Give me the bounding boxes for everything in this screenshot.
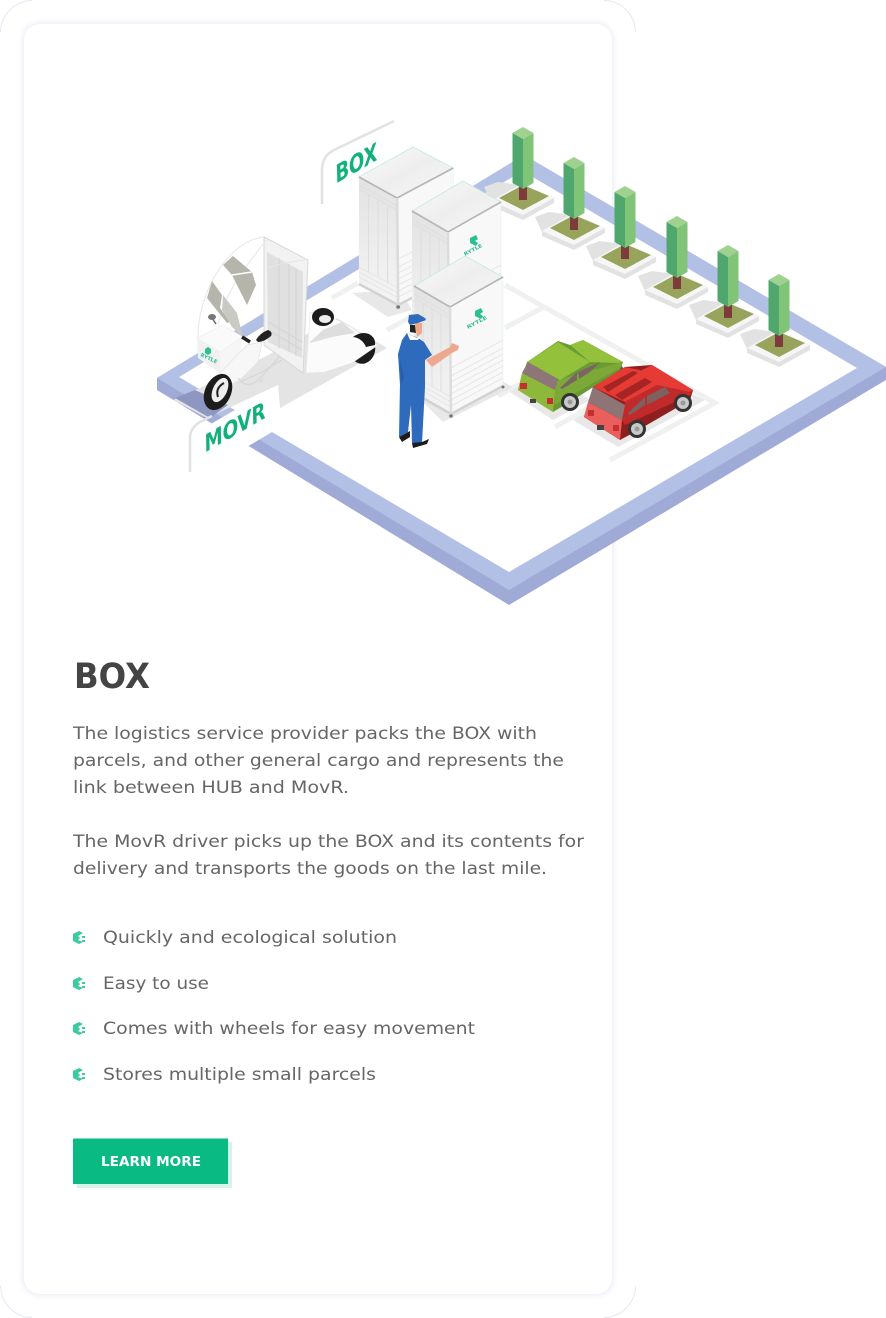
paragraph one: [72, 724, 564, 798]
handle: [242, 337, 250, 342]
logo on front rack: RYTLE: [466, 315, 489, 331]
bullet: wheels: Comes with wheels for easy movement: [103, 1019, 475, 1039]
bullet: quickly: Quickly and ecological solution: [103, 928, 397, 948]
logo on middle rack: RYTLE: [463, 243, 484, 258]
bullet: easy: Easy to use: [103, 974, 209, 994]
heading: BOX: [74, 657, 150, 697]
worker: [398, 314, 459, 448]
paragraph two: delivery and transports the goods on the last mile.: [73, 859, 547, 879]
scooter body: [220, 342, 262, 384]
label: MOVR: [190, 385, 280, 477]
canopy: [198, 237, 305, 337]
platform: [157, 155, 886, 605]
label: BOX: [322, 121, 394, 204]
learn more button: LEARN MORE: [101, 1154, 201, 1170]
rack back: [359, 147, 455, 309]
paragraph one: link between HUB and MovR.: [73, 778, 349, 798]
torso: [398, 333, 432, 387]
paragraph two: [72, 832, 584, 879]
isometric illustration: [157, 121, 886, 605]
logo on middle rack: [463, 235, 484, 258]
label: BOX: BOX: [333, 138, 381, 189]
bullet list: [73, 928, 475, 1085]
paragraph one: parcels, and other general cargo and represents the: [73, 751, 564, 771]
label: MOVR: MOVR: [202, 397, 268, 458]
scooter box: [197, 325, 243, 352]
red car: [584, 365, 693, 440]
MovR scooter: RYTLE: [199, 352, 219, 366]
row of trees: [484, 127, 810, 367]
head: [415, 323, 422, 337]
scooter floor: [173, 318, 387, 418]
paragraph two: The MovR driver picks up the BOX and its contents for: [72, 832, 584, 852]
legs: [399, 383, 425, 443]
sidecar: [306, 312, 378, 373]
parking lines: [332, 283, 715, 460]
seat: [256, 330, 272, 342]
cargo frame: [264, 237, 308, 373]
paragraph one: The logistics service provider packs the BOX with: [72, 724, 537, 744]
shoes: [399, 431, 429, 448]
learn more button: [73, 1138, 232, 1188]
arm: [426, 343, 459, 367]
rack front: [414, 256, 504, 418]
green car: [518, 340, 624, 412]
front wheel: [198, 369, 238, 415]
bullet: parcels: Stores multiple small parcels: [103, 1065, 376, 1085]
logo on front rack: [466, 308, 489, 331]
rack middle: [412, 181, 502, 343]
MovR scooter: [197, 237, 379, 415]
lower arc of rear wheel: [347, 333, 379, 367]
card panel: [24, 24, 612, 1294]
outer card corners: [0, 0, 636, 1318]
floor shadows: [352, 290, 705, 447]
mirror: [212, 318, 216, 324]
rear wheel top: [353, 333, 375, 347]
rear wheel far: [312, 308, 334, 326]
